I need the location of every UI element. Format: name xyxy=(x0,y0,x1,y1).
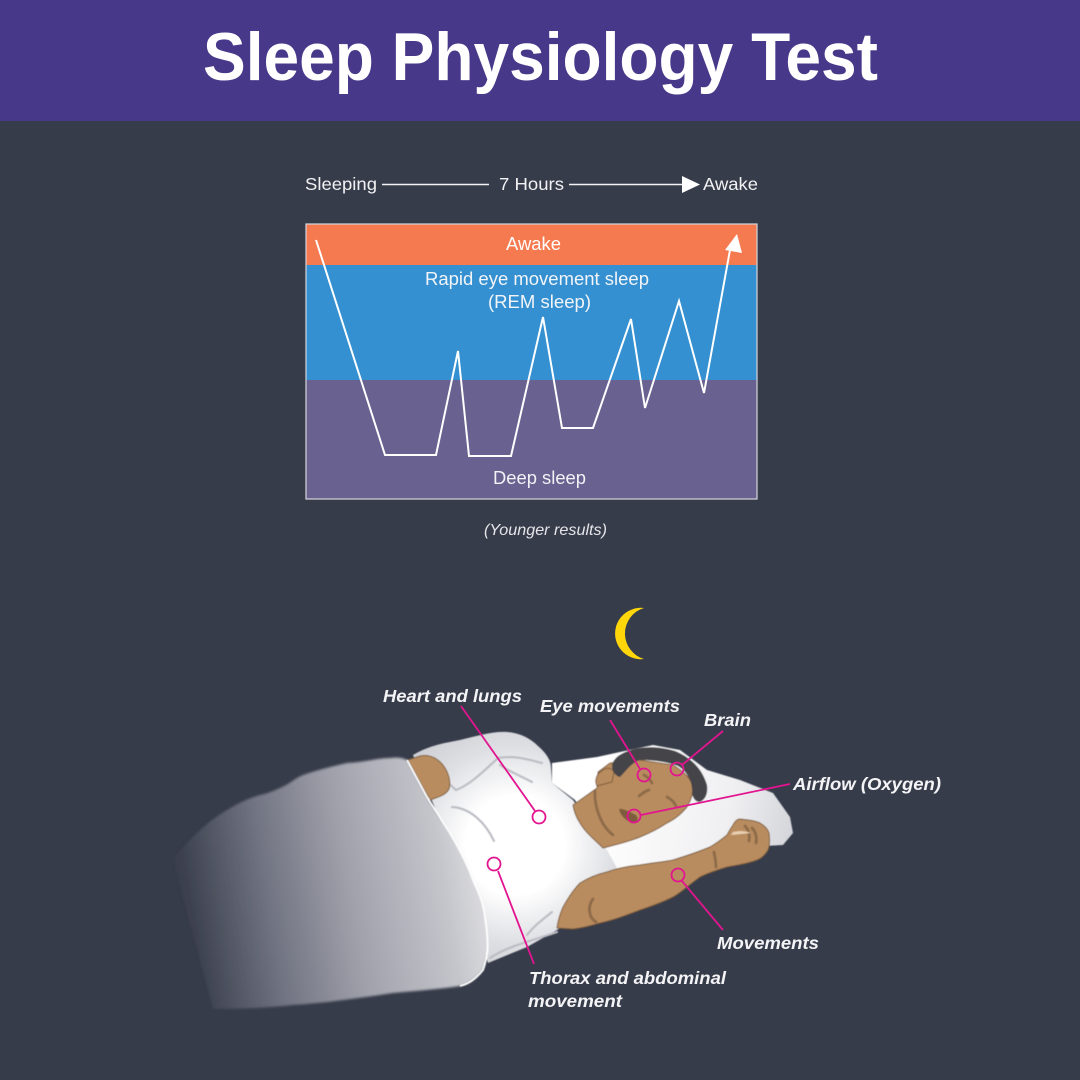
shirt xyxy=(413,732,617,963)
facial features xyxy=(595,775,676,835)
callout: eye movements: Eye movements xyxy=(540,696,680,716)
callout: heart and lungs: Heart and lungs xyxy=(383,686,522,706)
callout: heart and lungs xyxy=(383,686,546,824)
label: deep sleep: Deep sleep xyxy=(493,467,586,488)
label: REM sleep: Rapid eye movement sleep xyxy=(425,268,649,289)
blanket edge highlight xyxy=(407,760,488,986)
band: awake xyxy=(306,224,757,265)
label: awake: Awake xyxy=(506,234,561,254)
timeline header xyxy=(305,174,758,194)
timeline header: 7 Hours xyxy=(499,174,564,194)
callout: thorax and abdominal movement xyxy=(488,858,727,1011)
illustration: sleeping person xyxy=(173,732,793,1009)
chart caption: (Younger results) xyxy=(484,522,607,539)
icon: crescent moon xyxy=(615,608,644,659)
label: REM abbreviation: (REM sleep) xyxy=(488,291,591,312)
callout: eye movements xyxy=(540,696,680,782)
timeline header: Awake xyxy=(703,174,758,194)
callout: airflow xyxy=(628,774,941,822)
band: REM sleep xyxy=(306,265,757,380)
timeline header: Sleeping xyxy=(305,174,377,194)
head xyxy=(573,760,693,848)
title banner: Sleep Physiology Test xyxy=(203,19,878,95)
ear xyxy=(596,768,614,786)
sleep cycle line xyxy=(316,240,730,456)
shirt folds xyxy=(434,757,557,958)
arm creases xyxy=(589,826,756,922)
callout: brain: Brain xyxy=(704,710,751,730)
arrowhead xyxy=(725,234,742,253)
callout: thorax and abdominal movement: Thorax and abdominal xyxy=(529,968,727,988)
blanket xyxy=(173,758,488,1009)
callout: airflow: Airflow (Oxygen) xyxy=(792,774,941,794)
callout: movements xyxy=(672,868,819,953)
title banner xyxy=(0,0,1080,121)
pillow xyxy=(552,745,793,872)
chart border xyxy=(306,224,757,499)
callout: thorax and abdominal movement: movement xyxy=(528,991,623,1011)
sleep stage chart xyxy=(306,224,757,499)
forearm and hand xyxy=(557,819,770,929)
upper arm under the blanket xyxy=(408,755,450,800)
band: deep sleep xyxy=(306,380,757,499)
callout: brain xyxy=(670,710,751,776)
callout: movements: Movements xyxy=(717,933,819,953)
hair xyxy=(612,747,707,802)
